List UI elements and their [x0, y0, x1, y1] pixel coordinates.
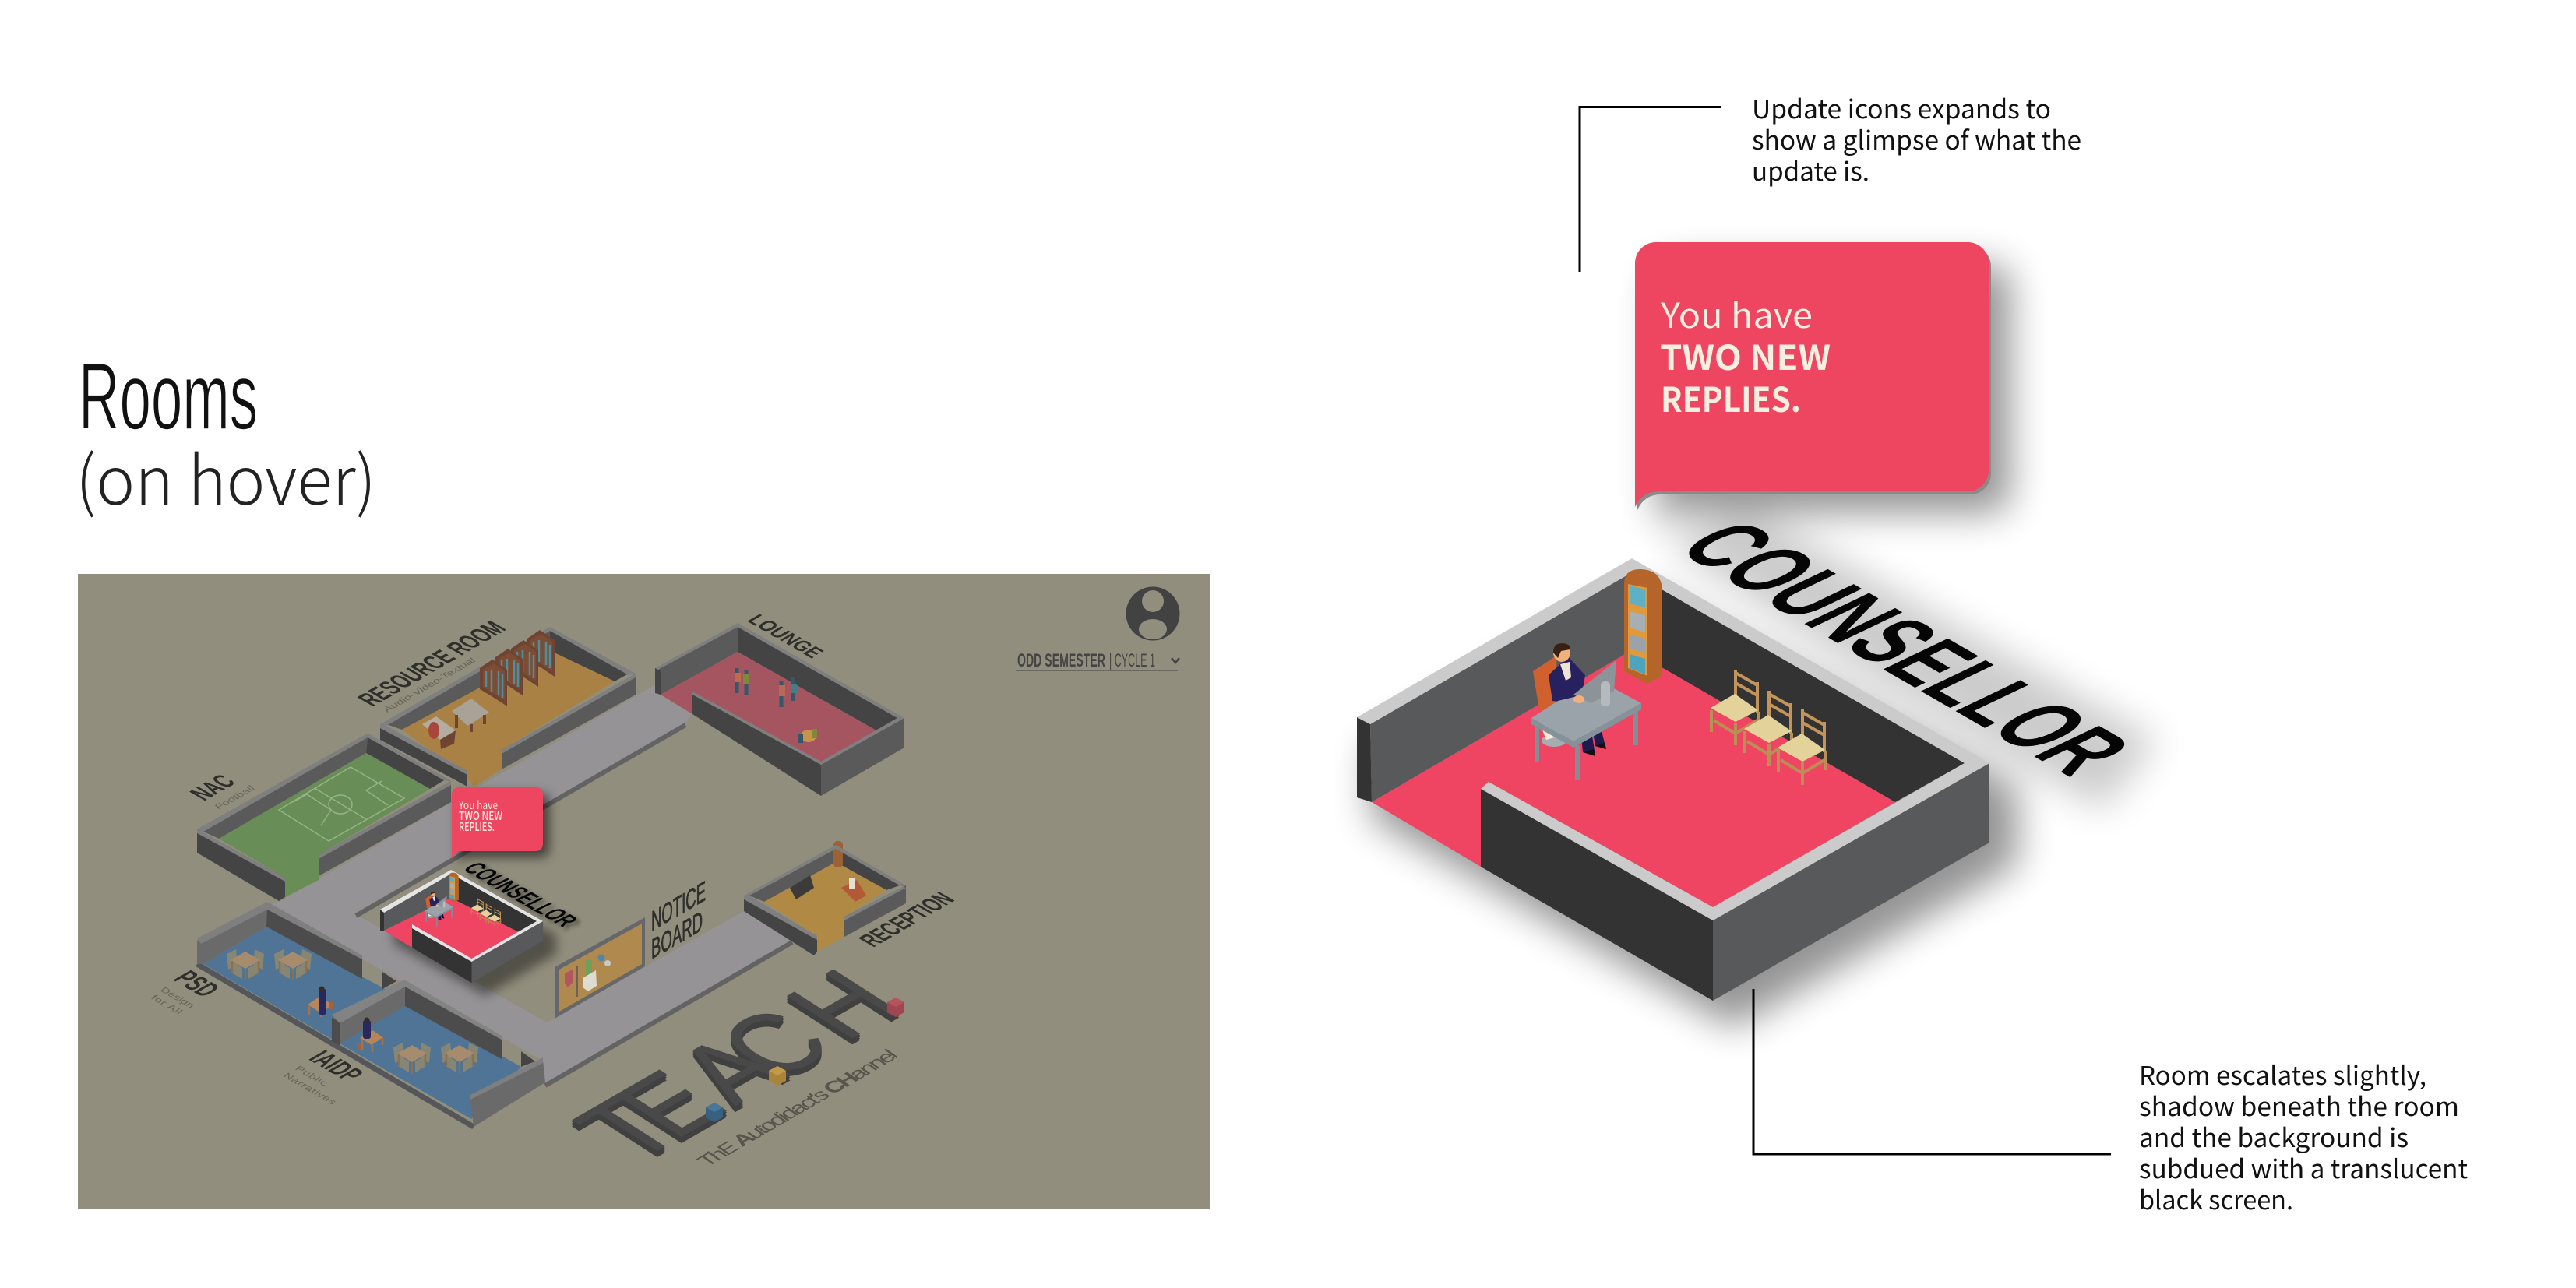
label: Football: Football [213, 783, 257, 811]
update bubble large [1635, 242, 2010, 529]
small update bubble: You have [458, 797, 498, 813]
reception desk and sofa [790, 841, 866, 902]
title: Rooms (on hover) [76, 343, 376, 524]
callout: update icon note: Update icons expands to [1752, 89, 2051, 126]
update bubble large: You have [1660, 288, 1813, 338]
label: for All: for All [149, 993, 185, 1016]
label: Public: Public [293, 1064, 330, 1088]
update bubble large: REPLIES. [1661, 372, 1801, 422]
back walls [1370, 572, 1965, 802]
label: IAIDP: IAIDP [302, 1046, 371, 1086]
label: Reception: RECEPTION [853, 889, 961, 951]
lounge people [735, 668, 817, 743]
panel: subdued floor map [78, 574, 1210, 1209]
label: Audio-Video-Textual: Audio-Video-Textual [381, 656, 477, 714]
callout: update icon note [1580, 89, 2081, 272]
callout: room escalation note: subdued with a translucent [2139, 1149, 2468, 1186]
callout: room escalation note: shadow beneath the room [2139, 1086, 2459, 1124]
room: PSD and IAIDP classrooms [197, 902, 545, 1127]
map labels [149, 611, 961, 1107]
classroom tables [227, 949, 478, 1074]
highlighted counsellor room, small: COUNSELLOR [460, 862, 587, 933]
large counsellor room detail [1357, 506, 2158, 1028]
furniture: counsellor at desk, bookcase and chairs [1531, 569, 1825, 785]
logo dot: amber [769, 1066, 786, 1086]
logo dot: blue [706, 1103, 723, 1122]
callout: update icon note: show a glimpse of what the [1752, 120, 2081, 157]
counsellor label [1654, 506, 2158, 810]
callout: room escalation note: Room escalates slightly, [2139, 1055, 2426, 1093]
room: reception [744, 841, 906, 955]
corridor road [267, 685, 792, 1086]
update bubble large: TWO NEW [1660, 330, 1831, 380]
callout: room escalation note: and the background is [2139, 1117, 2409, 1155]
front walls [1357, 558, 1989, 1001]
label: Narratives: Narratives [281, 1071, 339, 1107]
room: lounge [655, 623, 904, 796]
small room furniture [425, 873, 501, 927]
highlighted counsellor room, small [380, 859, 587, 996]
room floor [1372, 650, 1895, 907]
seated figures [308, 986, 383, 1052]
logo: TEACH wordmark: TEACH [549, 952, 926, 1177]
room shadow [1371, 592, 2017, 1028]
label: Lounge: LOUNGE [742, 611, 829, 661]
label: NAC: NAC [184, 771, 241, 804]
small update bubble [452, 787, 549, 865]
label: Notice: NOTICE [651, 875, 706, 938]
logo tagline: ThE Autodidact's CHannel [692, 1046, 903, 1170]
title: Rooms (on hover): (on hover) [76, 427, 376, 524]
label: Resource Room: RESOURCE ROOM [351, 617, 513, 710]
title: Rooms (on hover): Rooms [79, 343, 258, 449]
icon: user profile [1126, 587, 1179, 640]
callout: room escalation note [1753, 989, 2468, 1217]
semester dropdown: | CYCLE 1 [1109, 650, 1155, 671]
room: resource room [380, 627, 636, 787]
small update bubble: REPLIES. [459, 818, 495, 835]
small counsellor label: COUNSELLOR [456, 859, 584, 930]
callout: update icon note: update is. [1752, 151, 1869, 188]
bookshelves [480, 630, 555, 706]
room: NAC football field [197, 734, 451, 901]
study tables [422, 699, 489, 749]
semester dropdown: ODD SEMESTER [1017, 650, 1105, 671]
label: Board: BOARD [651, 905, 703, 966]
small update bubble: TWO NEW [459, 808, 502, 824]
callout: room escalation note: black screen. [2139, 1180, 2293, 1217]
label: Design: Design [158, 985, 197, 1010]
label: PSD: PSD [166, 966, 226, 1001]
counsellor label: COUNSELLOR [1654, 509, 2155, 787]
logo dot: red [887, 998, 904, 1017]
notice board [555, 917, 645, 1019]
